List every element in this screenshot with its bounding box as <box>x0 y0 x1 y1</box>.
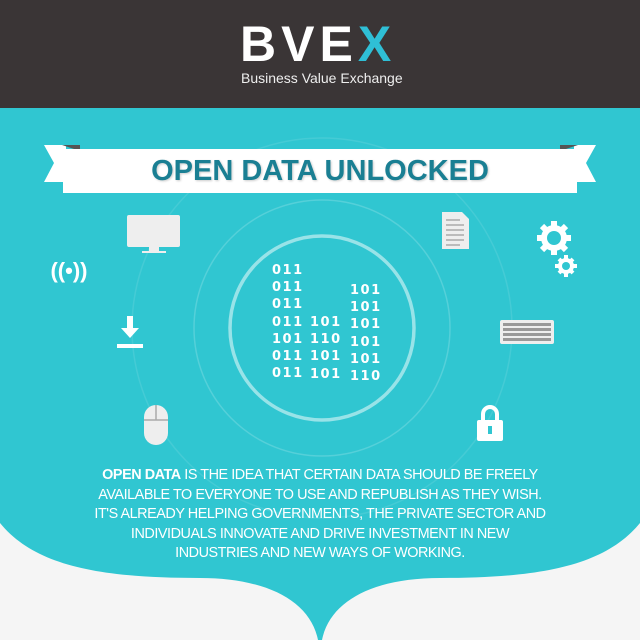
icon: wifi signal: ((•)) <box>50 258 88 283</box>
icon: padlock <box>477 405 503 441</box>
logo: Business Value Exchange <box>241 70 403 86</box>
logo: BVEX <box>240 16 396 72</box>
binary data block: 101 <box>310 349 342 364</box>
description text <box>94 467 546 561</box>
icon: keyboard <box>500 320 554 344</box>
icon: monitor <box>127 215 180 253</box>
binary data block: 110 <box>310 332 342 347</box>
description text: INDIVIDUALS INNOVATE AND DRIVE INVESTMENT IN NEW <box>131 526 509 542</box>
binary data block: 101 <box>350 317 382 332</box>
description text: OPEN DATA IS THE IDEA THAT CERTAIN DATA SHOULD BE FREELY <box>102 467 538 483</box>
binary data block: 011 <box>272 349 304 364</box>
binary data block: 011 <box>272 366 304 381</box>
binary data block: 011 <box>272 297 304 312</box>
description text: IT'S ALREADY HELPING GOVERNMENTS, THE PRIVATE SECTOR AND <box>94 506 546 522</box>
binary data block <box>272 263 382 384</box>
binary data block: 011 <box>272 263 304 278</box>
title banner <box>44 145 596 193</box>
binary data block: 101 <box>350 300 382 315</box>
binary data block: 101 <box>350 352 382 367</box>
description text: AVAILABLE TO EVERYONE TO USE AND REPUBLISH AS THEY WISH. <box>98 486 542 502</box>
binary data block: 110 <box>350 369 382 384</box>
icon: mouse <box>144 405 168 445</box>
binary data block: 101 <box>310 315 342 330</box>
description text: INDUSTRIES AND NEW WAYS OF WORKING. <box>175 545 465 561</box>
binary data block: 101 <box>350 335 382 350</box>
header <box>0 0 640 108</box>
binary data block: 101 <box>310 367 342 382</box>
binary data block: 101 <box>272 332 304 347</box>
binary data block: 101 <box>350 283 382 298</box>
icon: gears <box>537 221 577 277</box>
binary data block: 011 <box>272 280 304 295</box>
binary data block: 011 <box>272 315 304 330</box>
title banner: OPEN DATA UNLOCKED <box>151 155 489 187</box>
icon: document <box>442 212 469 249</box>
icon: download <box>117 316 143 348</box>
